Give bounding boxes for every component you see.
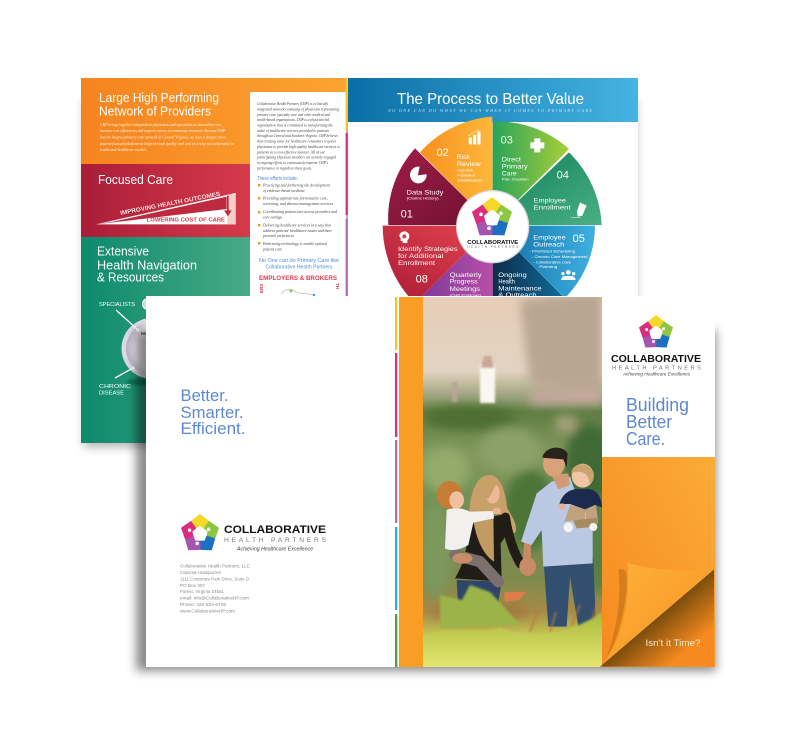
tagline: better smarter efficient: [180, 386, 246, 438]
back cover: left page: [179, 386, 327, 614]
orange band: [399, 297, 423, 667]
text block: contact address: Collaborative Health Partners, LLC: [180, 564, 251, 568]
text block: providers description: has the largest primary care network in Central Virginia, we have a deeper, more: [100, 134, 226, 140]
segment 06: ongoing health maintenance: Ongoing: [498, 272, 527, 279]
front cover: orange panel with page curl: [600, 457, 715, 667]
text block: contact address: email: info@CollaborativeHP.com: [180, 596, 249, 600]
segment 05: employee outreach: [493, 226, 595, 298]
text block: introduction: throughout Central and Southern Virginia. CHP believes: [257, 133, 338, 138]
circular diagram fragment: TH: [335, 283, 340, 290]
subtitle: NO ONE CAN DO WHAT WE CAN WHEN IT COMES TO PRIMARY CARE: [387, 108, 593, 113]
logo: back cover: COLLABORATIVE: [224, 524, 326, 536]
text block: introduction: [256, 101, 341, 170]
tagline: better smarter efficient: Efficient.: [180, 419, 246, 438]
wedge chart: outcomes and cost: IMPROVING HEALTH OUTCOMES: [120, 192, 221, 217]
segment 04: employee enrollment: Employee: [534, 197, 566, 204]
bulleted list: personal preferences: [262, 233, 294, 238]
segment 08: identify strategies: 08: [416, 273, 428, 285]
gauge diagram: [99, 298, 182, 396]
label: specialists: SPECIALISTS: [99, 302, 135, 308]
segment 02: risk review: Risk: [457, 154, 471, 161]
logo: front cover: COLLABORATIVE: [611, 354, 701, 365]
segment 02: risk review: Review: [457, 161, 481, 168]
segment 01: data study: Data Study: [407, 189, 444, 196]
back sheet: spine colour strips: [346, 78, 348, 297]
segment 02: risk review: 02: [437, 147, 449, 159]
logo: front cover: [611, 316, 701, 376]
segment 05: employee outreach: Outreach: [533, 242, 565, 249]
text block: contact address: PO Box 307: [180, 583, 205, 588]
text block: introduction: value of healthcare services provided to patients: [257, 128, 329, 133]
bulleted list: [258, 182, 338, 252]
segment 04: employee enrollment: 04: [557, 170, 569, 182]
page curl: [600, 563, 714, 667]
segment 01: data study: (Claims History): [407, 197, 439, 201]
panel: green health navigation: [81, 237, 250, 443]
bulleted list: of evidence-based medicine: [263, 188, 305, 193]
segment 02: risk review: [420, 117, 493, 225]
text block: introduction: performance in regards to these goals.: [256, 165, 312, 170]
centre logo badge: HEALTH PARTNERS: [467, 245, 519, 249]
panel: blue header: [348, 78, 638, 122]
text block: introduction: integrated network consisting of physicians representing: [257, 106, 340, 111]
bulleted list: patient care: [262, 246, 282, 252]
family figures: [437, 448, 602, 627]
segment 06: ongoing health maintenance: 06: [541, 294, 553, 306]
segment 05: employee outreach: 05: [573, 233, 585, 245]
back sheet shadow: [84, 100, 636, 447]
spine colour strips: [395, 297, 397, 667]
segment 07: quarterly progress meetings: Meetings: [450, 286, 481, 293]
heading: extensive health navigation: [97, 244, 197, 284]
heading: employers and brokers: EMPLOYERS & BROKERS: [259, 276, 337, 282]
heading: large high performing network: Large High Performing: [99, 91, 219, 105]
segment 05: employee outreach: Employee: [533, 235, 566, 242]
panel: white intro column: [250, 92, 346, 297]
text block: contact address: Corporate Headquarters: [180, 570, 222, 575]
callout: no one can do primary care: Collaborative Health Partners: [266, 264, 333, 270]
centre logo badge: COLLABORATIVE: [467, 240, 519, 246]
foreground grass: [432, 584, 602, 635]
text block: contact address: [180, 564, 251, 614]
segment 08: identify strategies: for Additional: [398, 253, 444, 260]
segment 07: quarterly progress meetings: Quarterly: [450, 272, 482, 279]
subheading: these efforts include: These efforts include:: [257, 176, 298, 182]
title: the process to better value: The Process to Better Value: [397, 91, 584, 108]
callout: no one can do primary care: [259, 258, 339, 270]
text block: introduction: patients in a cost-effective manner. All of our: [256, 149, 325, 154]
bulleted list: Embracing technology to enable optimal: [262, 241, 328, 246]
text block: contact address: 1111 Corporate Park Drive, Suite D: [180, 576, 250, 582]
photo: family walking in a meadow: [423, 297, 602, 667]
logo: back cover: HEALTH PARTNERS: [224, 537, 327, 544]
panel: orange providers: [81, 78, 346, 164]
segment 03: direct primary care: Plan Creation: [502, 177, 529, 181]
segment 06: ongoing health maintenance: [493, 226, 563, 326]
segment 02: risk review: High Risk: [457, 169, 473, 173]
heading: extensive health navigation: Extensive: [97, 244, 149, 258]
text block: providers description: CHP brings together independent physicians and specialists to streamline care,: [100, 122, 222, 128]
bulleted list: care settings: [263, 214, 282, 219]
bulleted list: Coordinating patient care across providers and: [263, 209, 338, 214]
text block: providers description: increase cost efficiencies and improve access to community resources. Because CHP: [100, 128, 225, 133]
segment 01: data study: 01: [401, 209, 413, 221]
segment 08: identify strategies: [383, 226, 493, 303]
centre logo badge: [456, 190, 529, 263]
logo: back cover: Achieving Healthcare Excellence: [236, 546, 313, 552]
segment 04: employee enrollment: [493, 152, 602, 225]
segment 07: quarterly progress meetings: (CHP Employer): [450, 294, 481, 298]
segment 05: employee outreach: - Prioritized Scheduling: [529, 249, 575, 253]
back sheet: left page: [81, 78, 346, 443]
label: chronic disease: [99, 384, 131, 396]
text block: providers description: patient-focused platform to align around quality and cost in a way not achievable in: [99, 141, 235, 146]
segment 03: direct primary care: Direct: [502, 156, 521, 163]
wedge chart: outcomes and cost: LOWERING COST OF CARE: [147, 218, 225, 224]
tagline: building better care: Care.: [626, 429, 665, 449]
text block: introduction: organization that is committed to transforming the: [257, 122, 333, 128]
text block: providers description: traditional healthcare models.: [100, 147, 147, 152]
segment 07: quarterly progress meetings: Progress: [450, 279, 478, 286]
circular diagram fragment: [259, 283, 340, 296]
heading: large high performing network: Network of Providers: [99, 104, 211, 118]
tagline: building better care: Building: [626, 395, 689, 415]
heading: extensive health navigation: Health Navigation: [97, 258, 197, 272]
text block: contact address: Phone: 434-534-6726: [180, 602, 226, 607]
callout: no one can do primary care: No One can do Primary Care like: [259, 258, 339, 264]
heading: focused care: Focused Care: [98, 173, 173, 187]
figure: boy: [437, 481, 527, 602]
process wheel: [383, 117, 602, 328]
text block: introduction: Collaborative Health Partners (CHP) is a clinically: [257, 101, 328, 106]
segment 02: risk review: Stratification: [457, 179, 483, 183]
tower: [452, 356, 495, 403]
label: chronic disease: DISEASE: [99, 390, 124, 396]
text block: introduction: primary care, specialty care and other medical and: [256, 112, 331, 118]
figure: man: [519, 448, 596, 627]
text block: providers description: [99, 122, 235, 152]
circular diagram fragment: ERS: [259, 284, 264, 293]
logo: front cover: HEALTH PARTNERS: [612, 366, 701, 372]
segment 04: employee enrollment: Enrollment: [534, 204, 571, 211]
segment 02: risk review: Population: [457, 173, 475, 177]
segment 03: direct primary care: 03: [501, 135, 513, 147]
segment 05: employee outreach: Planning: [539, 265, 557, 269]
text block: contact address: www.CollaborativeHP.com: [180, 608, 235, 614]
text block: contact address: Forest, Virginia 24551: [180, 589, 224, 594]
text block: introduction: that creating value for healthcare consumers requires: [257, 139, 336, 144]
segment 06: ongoing health maintenance: Health: [498, 279, 515, 286]
caption: isn't it time: Isn't it Time?: [646, 638, 700, 648]
front cover: white logo panel: [602, 297, 715, 457]
segment 03: direct primary care: [493, 122, 569, 225]
bulleted list: address patients' healthcare issues and their: [263, 228, 332, 233]
segment 03: direct primary care: Primary: [502, 164, 528, 171]
tagline: building better care: [626, 395, 689, 449]
segment 08: identify strategies: Enrollment: [398, 260, 435, 267]
logo: front cover: Achieving Healthcare Excellence: [622, 372, 691, 376]
tagline: better smarter efficient: Smarter.: [180, 403, 244, 422]
text block: introduction: participating physician members are actively engaged: [256, 155, 337, 160]
heading: extensive health navigation: & Resources: [97, 270, 164, 284]
bulleted list: screening, and disease management services: [263, 201, 333, 207]
segment 03: direct primary care: Care: [502, 171, 517, 178]
figure: toddler: [558, 464, 602, 532]
text block: introduction: in ongoing efforts to continuously improve CHP's: [257, 160, 328, 165]
segment 01: data study: [388, 148, 493, 225]
brochure mockup scene: [78, 78, 723, 678]
wedge chart: outcomes and cost: [96, 192, 236, 224]
label: chronic disease: CHRONIC: [99, 384, 131, 390]
text block: introduction: physicians to provide high-quality healthcare services to: [256, 144, 341, 149]
bulleted list: Practicing and furthering the development: [262, 182, 331, 188]
tagline: building better care: Better: [626, 412, 672, 432]
logo: back cover: [179, 515, 327, 555]
segment 06: ongoing health maintenance: & Outreach: [498, 292, 537, 299]
segment 06: ongoing health maintenance: Maintenance: [498, 285, 542, 292]
front sheet: [146, 290, 715, 667]
figure: woman: [455, 475, 521, 612]
gauge diagram: PRIMARY: [141, 332, 158, 336]
panel: red focused care: [81, 164, 250, 237]
segment 05: employee outreach: - Collaborative Care: [533, 260, 571, 264]
tagline: better smarter efficient: Better.: [180, 386, 228, 405]
segment 07: quarterly progress meetings: [420, 226, 493, 328]
segment 05: employee outreach: - Chronic Care Management: [532, 255, 588, 259]
front sheet shadow: [136, 330, 716, 671]
bulleted list: Providing appropriate preventative care,: [262, 196, 328, 202]
heading: large high performing network: [99, 91, 219, 118]
segment 08: identify strategies: Identify Strategies: [398, 246, 458, 253]
back sheet: right page: [348, 78, 638, 328]
bulleted list: Delivering healthcare services in a way that: [262, 222, 332, 228]
text block: introduction: health-based organizations. CHP is a physician-led: [257, 117, 330, 122]
